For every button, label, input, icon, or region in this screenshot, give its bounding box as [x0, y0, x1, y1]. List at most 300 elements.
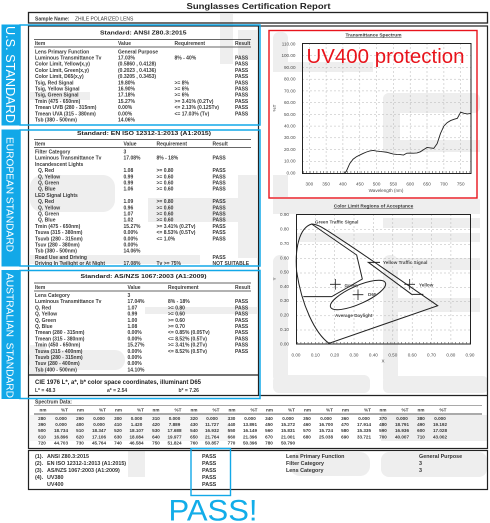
EN ISO table text: <= 1.0% [156, 236, 176, 242]
AS/NZS table text: PASS [235, 336, 249, 342]
plot frame [302, 44, 471, 174]
EN ISO table text: Result [212, 142, 228, 148]
ANSI table text: PASS [235, 80, 249, 86]
spectrum values: 16.936 [395, 428, 409, 433]
AS/NZS table text: Lens Category [35, 293, 70, 299]
chart annotations: Average Daylight [335, 313, 373, 318]
ANSI table text: >= 6% [174, 86, 190, 92]
spectrum values: 300 [114, 416, 122, 421]
spectrum values: 370 [379, 416, 387, 421]
y axis labels: 0.20 [280, 312, 289, 318]
spectrum values: 0.000 [434, 416, 446, 421]
y axis labels: 100.00 [281, 53, 296, 58]
EN ISO table text: Q, Yellow [38, 174, 60, 180]
EN ISO table text: Q, Green [38, 212, 59, 218]
spectrum values: 570 [303, 428, 311, 433]
spectrum values: 770 [228, 440, 236, 446]
spectrum values: 530 [152, 428, 160, 433]
EN ISO table text: NOT SUITABLE [212, 261, 250, 267]
chart title: Transmittance Spectrum [346, 32, 401, 38]
EN ISO table text: >= 0.60 [156, 174, 174, 180]
spectrum values: 590 [379, 428, 387, 433]
y axis labels: 10.00 [284, 159, 296, 164]
summary results box: UV400 [47, 482, 63, 488]
x axis labels: Y [272, 277, 277, 281]
EN ISO table text: >= 0.80 [156, 168, 174, 174]
EN ISO table text: 17.08% [124, 261, 141, 267]
ANSI table text: >= 8% [174, 80, 190, 86]
chart grid [296, 214, 470, 344]
spectrum values: 0.000 [244, 416, 256, 421]
spectrum values: 40.007 [395, 434, 409, 439]
x axis labels: 0.70 [427, 352, 436, 358]
EN ISO table text: Filter Category [35, 150, 71, 156]
AS/NZS table text: Tmean (315 - 380nm) [35, 336, 85, 342]
spectrum values: 280 [38, 416, 46, 421]
EN ISO table text: 1.07 [124, 212, 133, 218]
spectrum values: 0.000 [93, 422, 105, 427]
spectrum values: 310 [152, 416, 160, 421]
y axis labels: 70.00 [284, 88, 296, 93]
summary results box: UV380 [47, 475, 63, 481]
spectrum values: 16.149 [243, 428, 257, 433]
EN ISO table text: PASS [212, 218, 226, 224]
x axis labels: 550 [390, 182, 398, 186]
spectrum values: %T [402, 408, 409, 412]
summary results box: 3 [419, 461, 422, 467]
sample name box [28, 12, 488, 23]
EN ISO table text: >= 0.60 [156, 205, 174, 211]
EN ISO table text: Tv >= 75% [156, 261, 182, 267]
summary results box: (3). [35, 468, 44, 474]
label: European standard: EUROPEAN STANDARD [4, 137, 16, 252]
spectrum values: nm [418, 408, 424, 412]
AS/NZS table text: 0.99 [128, 312, 137, 318]
EN ISO table text: PASS [212, 199, 226, 205]
summary results box: Filter Category [286, 461, 324, 467]
ANSI table text: 14.06% [118, 117, 136, 123]
sample name box: Sample Name: [35, 16, 70, 22]
EN ISO table text: 15.27% [124, 224, 141, 230]
spectrum values: 0.000 [169, 416, 181, 421]
ANSI table text: 0.00% [118, 111, 133, 117]
AS/NZS table text: >= 0.60 [168, 312, 185, 318]
spectrum values: 0.000 [55, 416, 67, 421]
EN ISO table text: Q, Blue [38, 218, 56, 224]
EN ISO table text: Driving In Twilight or At Night [35, 261, 105, 267]
ANSI table text: PASS [235, 68, 249, 74]
spectrum values: 13.891 [243, 422, 257, 427]
summary results box: PASS [202, 461, 217, 467]
spectrum values: 19.977 [167, 434, 182, 439]
ANSI table text: Value [118, 41, 131, 47]
ANSI table text: Tmin (475 - 650nm) [35, 99, 81, 105]
ANSI table text: 0.00% [118, 105, 133, 111]
EN ISO table text: PASS [212, 236, 226, 242]
spectrum values: %T [251, 408, 258, 412]
spectrum values: 17.688 [167, 428, 182, 433]
spectrum values: 780 [265, 440, 273, 446]
spectrum values: 18.734 [54, 428, 68, 433]
spectrum values: 490 [417, 422, 425, 427]
spectrum values: 680 [303, 434, 311, 439]
panel: ANSI standard [34, 30, 251, 124]
AS/NZS table text: PASS [235, 343, 249, 349]
spectrum values: 730 [76, 440, 84, 446]
x axis labels: 450 [356, 182, 364, 186]
x axis labels: 0.40 [369, 352, 378, 358]
plot frame [296, 214, 470, 344]
AS/NZS table text: 0.00% [128, 361, 142, 367]
label: U.S. standard: U.S. STANDARD [3, 26, 18, 123]
spectrum values: 620 [76, 434, 84, 439]
spectrum values: 15.272 [281, 422, 295, 427]
EN ISO table text: Item [35, 142, 46, 148]
spectrum values: 750 [152, 440, 160, 446]
y axis labels: 0.50 [280, 270, 289, 274]
summary results box: Lens Primary Function [286, 454, 344, 460]
EN ISO table text [35, 142, 250, 267]
y axis labels [281, 42, 296, 176]
x axis labels: 600 [406, 182, 414, 186]
AS/NZS table text: Requirement [168, 285, 199, 291]
spectrum values: %T [364, 408, 371, 412]
EN ISO table text: Q, Red [38, 199, 54, 205]
spectrum values: 15.831 [281, 428, 295, 433]
ANSI table text: (0.2023 , 0.4136) [118, 68, 156, 74]
spectrum values: 630 [114, 434, 122, 439]
ANSI table text [35, 41, 251, 124]
spectrum values: %T [137, 408, 144, 412]
spectrum values: 340 [265, 416, 273, 421]
spectrum values: %T [61, 408, 68, 412]
summary results box: EN ISO 12312-1:2013 (A1:2015) [47, 461, 126, 467]
y axis labels [280, 212, 289, 346]
EN ISO table text: LED Signal Lights [35, 193, 78, 199]
chart annotations [315, 220, 434, 318]
ANSI table text: Tsig, Red Signal [35, 80, 74, 86]
summary results box: PASS [202, 475, 217, 481]
spectrum values: 650 [190, 434, 198, 439]
AS/NZS table text: Tsuv (280 - 400nm) [35, 361, 80, 367]
spectrum values: nm [115, 408, 122, 412]
EN ISO table text: Q, Red [38, 168, 54, 174]
summary results box: Lens Category [286, 468, 323, 474]
spectrum values: 740 [114, 440, 122, 446]
spectrum values: 0.000 [93, 416, 105, 421]
ANSI table text: >= 6% [174, 93, 190, 99]
ANSI table text: <= 2.13% (0.125Tv) [174, 105, 219, 111]
AS/NZS table text: PASS [235, 330, 249, 336]
EN ISO table text: <= 8.53% (0.5Tv) [156, 230, 196, 236]
x axis labels: 0.90 [466, 352, 475, 358]
EN ISO table text: >= 3.41% (0.2Tv) [156, 224, 196, 230]
chart annotations: Green Traffic Signal [315, 220, 358, 224]
spectrum values: 0.000 [396, 416, 408, 421]
CIE colour coordinates [35, 379, 201, 394]
spectrum values: nm [229, 408, 235, 412]
EN ISO table text: 14.06% [124, 249, 141, 255]
colour regions [296, 224, 438, 343]
y axis labels: 80.00 [284, 76, 296, 82]
AS/NZS table text: PASS [235, 305, 249, 311]
spectrum values: 420 [152, 422, 160, 427]
report title: Sunglasses Certification Report [186, 1, 331, 11]
spectrum values: 470 [341, 422, 349, 427]
y axis labels: 0.10 [280, 327, 289, 332]
EN ISO table text: 0.00% [124, 242, 138, 248]
chart annotations: Green [344, 283, 358, 288]
EN ISO heading: Standard: EN ISO 12312-1:2013 (A1:2015) [77, 131, 211, 137]
transmittance spectrum chart [272, 32, 471, 193]
spectrum values: 660 [228, 434, 236, 439]
spectrum values: nm [77, 408, 84, 412]
spectrum values: 540 [190, 428, 198, 433]
CIE colour coordinates: b* = 7.26 [178, 388, 199, 394]
EN ISO table text: PASS [212, 255, 226, 261]
x axis labels: 700 [440, 182, 448, 186]
x axis labels: 0.50 [388, 352, 398, 358]
y axis labels: 0.40 [280, 284, 289, 289]
spectrum values: 50.790 [281, 440, 295, 446]
EN ISO table text: 1.09 [124, 199, 133, 205]
AS/NZS table text: Tmean (280 - 315nm) [35, 330, 85, 336]
AS/NZS table text: <= 8.52% (0.5Tv) [168, 349, 207, 355]
spectrum values: %T [175, 408, 182, 412]
AS/NZS table text: <= 0.85% (0.05Tv) [168, 330, 210, 336]
spectrum values: 400 [76, 422, 84, 427]
y axis labels: 0.70 [280, 241, 289, 246]
x axis labels: X [381, 358, 385, 364]
AS/NZS table text: 15.27% [128, 343, 145, 349]
spectrum values: nm [266, 408, 273, 412]
EN ISO table text: Q, Blue [38, 187, 56, 193]
EN ISO table text: PASS [212, 212, 226, 218]
spectrum data table [34, 400, 482, 446]
chart annotations: Yellow [419, 282, 434, 288]
AS/NZS table text: Tsuva (315 - 400nm) [35, 349, 83, 355]
label: U.S. standard [2, 24, 260, 126]
spectrum values: 290 [76, 416, 84, 421]
AS/NZS table text: Q, Red [35, 305, 51, 311]
AS/NZS table text: 1.07 [128, 305, 137, 311]
EN ISO table text: >= 0.60 [156, 180, 174, 186]
spectrum values: 44.703 [54, 440, 68, 446]
AS/NZS table text: 0.00% [128, 355, 142, 361]
spectrum values: 560 [265, 428, 273, 433]
AS/NZS table text: Value [128, 285, 141, 291]
EN ISO table text: Q, Yellow [38, 205, 60, 211]
EN ISO table text: 17.08% [124, 156, 141, 162]
summary results box: AS/NZS 1067:2003 (A1:2009) [47, 468, 120, 474]
CIE colour coordinates: a* = 2.54 [107, 388, 127, 394]
y axis labels: 0.30 [280, 298, 289, 303]
ANSI table text: Tsig, Green Signal [35, 93, 79, 99]
ANSI table text: PASS [235, 111, 249, 117]
spectrum values: 670 [265, 434, 273, 439]
AS/NZS table text: PASS [235, 299, 249, 305]
AS/NZS table text: Q, Green [35, 318, 56, 324]
ANSI table text: Luminous Transmittance Tv [35, 56, 102, 62]
EN ISO table text: >= 0.60 [156, 212, 174, 218]
ANSI table text: Lens Primary Function [35, 49, 89, 55]
chart annotations: Yellow Traffic Signal [383, 260, 427, 265]
spectrum values: 18.347 [92, 428, 106, 433]
spectrum values: 430 [190, 422, 198, 427]
label: European standard [2, 130, 260, 266]
ANSI table text: PASS [235, 105, 249, 111]
summary results box: PASS [202, 482, 217, 488]
ANSI table text: 8% - 40% [174, 56, 197, 62]
EN ISO table text: PASS [212, 180, 226, 186]
spectrum values: 18.084 [129, 434, 144, 439]
spectrum values: 520 [114, 428, 122, 433]
spectrum values: 21.001 [281, 434, 295, 439]
x axis labels: 0.80 [446, 352, 456, 358]
x axis labels [272, 277, 475, 364]
spectrum values: 43.002 [433, 434, 447, 439]
callout: UV400 protection [269, 30, 477, 198]
spectrum values: 0.000 [320, 416, 332, 421]
spectrum values: 46.584 [129, 440, 144, 446]
ANSI table text: 17.18% [118, 93, 136, 99]
ANSI table text: Result [235, 41, 251, 47]
spectrum values: %T [288, 408, 295, 412]
AS/NZS table text: 0.00% [128, 349, 142, 355]
y axis labels: 40.00 [284, 124, 296, 128]
EN ISO table text: >= 0.60 [156, 187, 174, 193]
spectrum values: 380 [417, 416, 425, 421]
EN ISO table text: Luminous Transmittance Tv [35, 156, 102, 162]
x axis labels: 0.20 [330, 352, 340, 358]
EN ISO table text: Road Use and Driving [35, 255, 87, 261]
EN ISO table text: PASS [212, 174, 226, 180]
spectrum values: %T [213, 408, 220, 412]
summary results box: (1). [35, 454, 44, 460]
spectrum values: 0.000 [131, 416, 143, 421]
EN ISO table text: Tsuv (280 - 380nm) [35, 242, 80, 248]
spectrum values: 16.896 [54, 434, 68, 439]
ANSI table text: 19.80% [118, 80, 136, 86]
ANSI table text: Requirement [174, 41, 205, 47]
EN ISO table text: >= 0.80 [156, 199, 174, 205]
AS/NZS table text: Tsuvb (280 - 315nm) [35, 355, 83, 361]
spectrum rules [34, 406, 482, 414]
EN ISO table text: PASS [212, 205, 226, 211]
EN ISO table text: Q, Green [38, 180, 59, 186]
x axis labels: 400 [339, 182, 347, 186]
EN ISO table text: 1.02 [124, 218, 133, 224]
panel: EN ISO standard [34, 131, 251, 267]
ANSI table text: Item [35, 41, 46, 47]
ANSI table text: PASS [235, 86, 249, 92]
spectrum values: 50.396 [243, 440, 257, 446]
EN ISO table text: PASS [212, 187, 226, 193]
AS/NZS heading: Standard: AS/NZS 1067:2003 (A1:2009) [80, 274, 207, 280]
spectrum values: 440 [228, 422, 236, 427]
label: Australian standard [2, 270, 260, 399]
spectrum values: 50.857 [205, 440, 219, 446]
spectrum values: 0.000 [282, 416, 294, 421]
x axis labels: 0.00 [292, 352, 301, 358]
spectrum values: 18.107 [129, 428, 144, 433]
EN ISO table text: 0.00% [124, 236, 138, 242]
EN ISO table text: PASS [212, 230, 226, 236]
summary results box: PASS [202, 454, 217, 460]
AS/NZS table text: 17.04% [128, 299, 145, 305]
spectrum values: 580 [341, 428, 349, 433]
chart title: Color Limit Regions of Acceptance [334, 204, 414, 210]
ANSI table text: <= 17.03% (Tv) [174, 111, 210, 117]
EN ISO table text: 1.06 [124, 187, 133, 193]
ANSI table text: PASS [235, 93, 249, 99]
spectrum values: nm [304, 408, 311, 412]
EN ISO table text: Tsuvb (280 - 315nm) [35, 236, 83, 242]
summary results box: ANSI Z80.3:2015 [47, 454, 89, 460]
AS/NZS table text: >= 0.80 [168, 305, 185, 311]
y axis labels: 20.00 [284, 147, 296, 152]
ANSI table text: PASS [235, 56, 249, 62]
CIE colour coordinates: L* = 48.3 [35, 388, 56, 394]
ANSI table text: (0.3205 , 0.3453) [118, 74, 156, 80]
spectrum values: 21.764 [205, 434, 219, 439]
spectrum values: 350 [303, 416, 311, 421]
AS/NZS table text: PASS [235, 324, 249, 330]
ANSI table text: Tmean UVA (315 - 380nm) [35, 111, 96, 117]
ANSI table text: PASS [235, 62, 249, 68]
callout: PASS [168, 448, 258, 523]
spectrum values: 0.000 [358, 416, 370, 421]
y axis labels: 90.00 [284, 65, 296, 70]
spectrum heading: Spectrum Data: [35, 400, 72, 406]
ANSI table text: Color Limit, Green(x,y) [35, 68, 89, 74]
ANSI table rules [34, 40, 251, 47]
y axis labels: 0.00 [287, 170, 296, 176]
y axis labels: 0.90 [280, 212, 289, 217]
EN ISO table text: 1.08 [124, 168, 133, 174]
spectrum values: 510 [76, 428, 84, 433]
EN ISO table text: Incandescent Lights [35, 162, 84, 168]
sample name box: ZHILE POLARIZED LENS [75, 16, 134, 22]
AS/NZS table text: PASS [235, 312, 249, 318]
spectrum values: 21.396 [243, 434, 257, 439]
x axis labels: 300 [305, 182, 314, 186]
x axis labels: %T [272, 104, 277, 111]
x axis labels: 750 [457, 182, 465, 186]
AS/NZS table text: 0.00% [128, 330, 142, 336]
AS/NZS table rules [34, 283, 251, 291]
spectrum values: 0.000 [55, 422, 67, 427]
spectrum values: 17.914 [357, 422, 371, 427]
AS/NZS table text: Q, Blue [35, 324, 53, 330]
spectrum values: 17.028 [433, 428, 447, 433]
AS/NZS table text: 1.00 [128, 318, 137, 324]
label: Australian standard: AUSTRALIAN STANDARD [4, 273, 16, 398]
x axis labels: 500 [373, 182, 381, 186]
panel: AS/NZS standard [34, 274, 251, 373]
summary results box: General Purpose [419, 454, 462, 460]
ANSI table text: >= 3.41% (0.2Tv) [174, 99, 214, 105]
AS/NZS table text: >= 0.70 [168, 324, 185, 330]
chromaticity chart [272, 204, 475, 364]
EN ISO table text: PASS [212, 156, 226, 162]
AS/NZS table text: <= 8.52% (0.5Tv) [168, 336, 207, 342]
EN ISO table text: Tsb (380 - 500nm) [35, 249, 77, 255]
spectrum values: 0.000 [206, 416, 218, 421]
spectrum values: 18.791 [395, 422, 409, 427]
ANSI table text: (0.5860 , 0.4128) [118, 62, 156, 68]
spectrum values: nm [40, 408, 46, 412]
